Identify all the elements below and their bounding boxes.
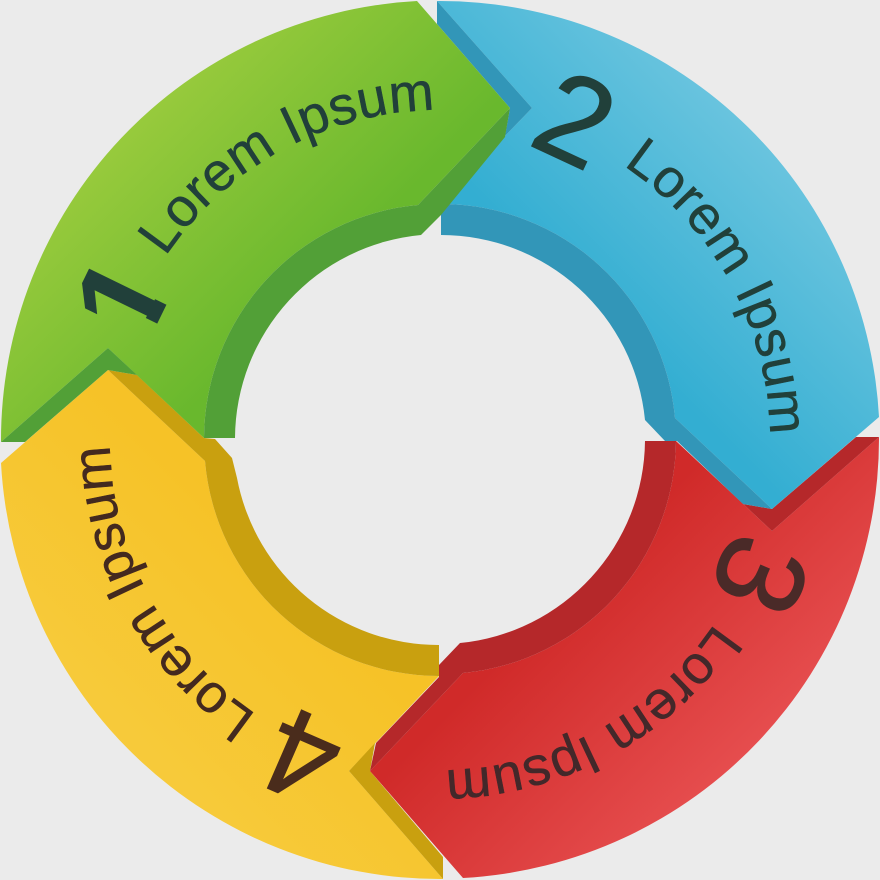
number 2: 2 (515, 43, 635, 197)
red inner side (370, 441, 676, 771)
yellow arrow body (1, 370, 443, 879)
segment 1: green (1, 1, 510, 442)
segment 4: yellow (1, 370, 443, 879)
green notch shadow (1, 348, 137, 442)
green label: Lorem Ipsum (138, 81, 432, 254)
green arrow body (1, 1, 510, 442)
yellow inner side (108, 370, 439, 676)
number 4: 4 (243, 679, 361, 833)
segment 3: red (370, 437, 879, 878)
yellow notch shadow (349, 743, 443, 879)
blue inner side (441, 204, 772, 509)
red arrow body (370, 437, 879, 878)
number 1: 1 (46, 237, 200, 359)
red label: Lorem Ipsum (448, 626, 742, 799)
red notch shadow (676, 437, 879, 531)
number 3: 3 (683, 516, 837, 634)
blue notch shadow (437, 1, 532, 136)
blue label: Lorem Ipsum (626, 138, 799, 432)
green inner side (204, 108, 510, 438)
segment 2: blue (437, 1, 879, 509)
yellow label: Lorem Ipsum (81, 448, 254, 742)
blue arrow body (437, 1, 879, 509)
